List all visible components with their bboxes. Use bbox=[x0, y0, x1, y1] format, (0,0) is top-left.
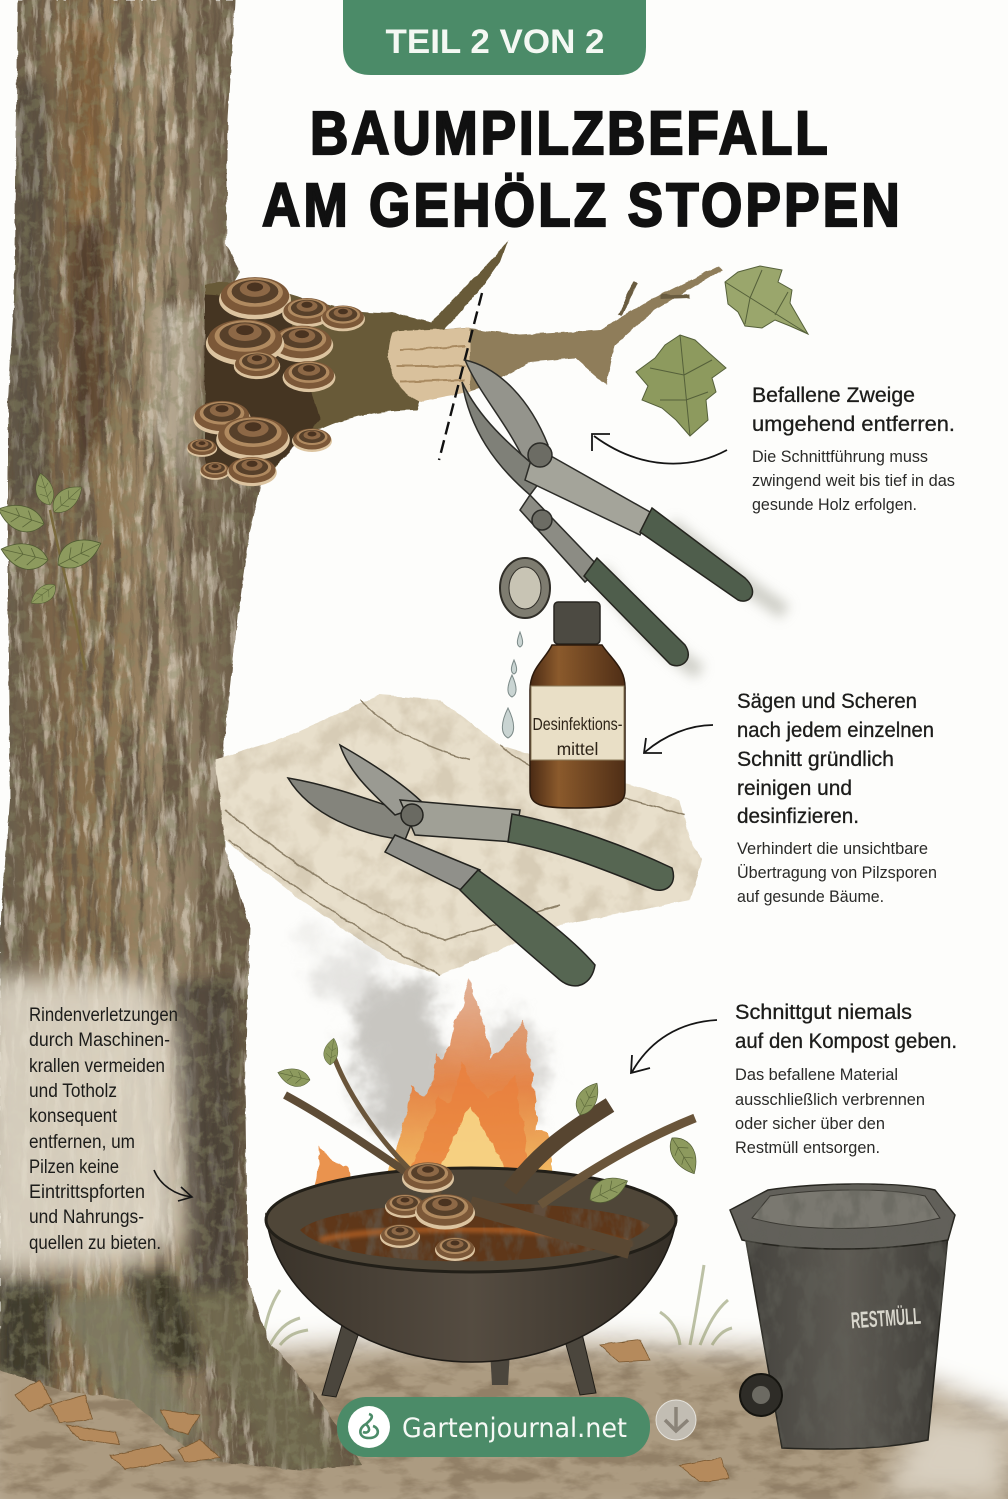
ground bbox=[0, 1322, 1008, 1499]
text block: no compost: ausschließlich verbrennen bbox=[735, 1091, 925, 1109]
bin label: RESTMÜLL bbox=[850, 1303, 922, 1333]
icon: download button bbox=[656, 1400, 696, 1440]
arrow: fire callout bbox=[631, 1020, 717, 1073]
pill: series label: TEIL 2 VON 2 bbox=[386, 23, 604, 61]
footer badge: Gartenjournal.net bbox=[402, 1413, 627, 1444]
tree trunk bbox=[0, 0, 370, 1480]
trunk sprig leaves bbox=[0, 471, 106, 670]
arrow: prevention note bbox=[154, 1170, 192, 1201]
branch leaves bbox=[636, 266, 808, 436]
text block: no compost bbox=[735, 1001, 957, 1157]
text block: remove branches: Die Schnittführung muss bbox=[752, 448, 928, 466]
text block: remove branches bbox=[752, 384, 955, 514]
text block: clean tools: Sägen und Scheren bbox=[737, 690, 917, 713]
text block: remove branches: gesunde Holz erfolgen. bbox=[752, 496, 917, 514]
text block: remove branches: zwingend weit bis tief in das bbox=[752, 472, 955, 490]
text block: clean tools: nach jedem einzelnen bbox=[737, 719, 934, 742]
grass tufts bbox=[262, 1265, 732, 1345]
text block: clean tools: desinfizieren. bbox=[737, 805, 859, 828]
footer badge bbox=[337, 1397, 650, 1457]
fallen leaves bbox=[15, 1340, 730, 1482]
dashed cut line bbox=[439, 293, 482, 460]
pale wash behind side note bbox=[0, 975, 182, 1275]
text block: prevention note: Pilzen keine bbox=[29, 1157, 119, 1178]
title bbox=[262, 100, 900, 240]
text block: clean tools bbox=[737, 690, 937, 906]
bracket fungi cluster bbox=[187, 277, 365, 486]
text block: no compost: Restmüll entsorgen. bbox=[735, 1139, 880, 1157]
branch bbox=[205, 240, 722, 482]
fire pit bowl bbox=[266, 1168, 677, 1397]
text block: prevention note: und Nahrungs- bbox=[29, 1207, 144, 1228]
text block: no compost: oder sicher über den bbox=[735, 1115, 885, 1133]
text block: remove branches: Befallene Zweige bbox=[752, 384, 915, 407]
icon: loppers bbox=[462, 360, 785, 672]
burning branches and fungi bbox=[276, 1037, 704, 1261]
bottle label: Desinfektions- bbox=[532, 714, 623, 734]
text block: prevention note: durch Maschinen- bbox=[29, 1030, 170, 1051]
icon: logo sprout bbox=[360, 1414, 378, 1438]
text block: clean tools: reinigen und bbox=[737, 777, 852, 800]
bottle label bbox=[532, 714, 623, 759]
cloth bbox=[210, 690, 710, 980]
icon: secateurs bbox=[288, 745, 673, 986]
text block: prevention note: konsequent bbox=[29, 1106, 118, 1127]
drops bbox=[502, 632, 523, 738]
text block: no compost: auf den Kompost geben. bbox=[735, 1030, 957, 1053]
text block: clean tools: Verhindert die unsichtbare bbox=[737, 840, 928, 858]
text block: prevention note: entfernen, um bbox=[29, 1132, 135, 1153]
text block: prevention note: Eintrittspforten bbox=[29, 1182, 145, 1203]
text block: clean tools: auf gesunde Bäume. bbox=[737, 888, 884, 906]
text block: no compost: Schnittgut niemals bbox=[735, 1001, 912, 1024]
text block: clean tools: Schnitt gründlich bbox=[737, 748, 894, 771]
text block: prevention note: krallen vermeiden bbox=[29, 1056, 165, 1077]
text block: prevention note bbox=[29, 1005, 178, 1254]
text block: prevention note: Rindenverletzungen bbox=[29, 1005, 178, 1026]
text block: remove branches: umgehend entferren. bbox=[752, 413, 955, 436]
flames bbox=[305, 978, 551, 1228]
text block: prevention note: und Totholz bbox=[29, 1081, 117, 1102]
arrow: branch callout bbox=[592, 434, 727, 464]
title: BAUMPILZBEFALL bbox=[310, 100, 828, 168]
text block: no compost: Das befallene Material bbox=[735, 1066, 898, 1084]
smoke bbox=[290, 919, 544, 1143]
bottle label: mittel bbox=[557, 739, 598, 759]
arrow: bottle callout bbox=[644, 725, 713, 753]
title: AM GEHÖLZ STOPPEN bbox=[262, 172, 900, 240]
text block: clean tools: Übertragung von Pilzsporen bbox=[737, 864, 937, 882]
icon: waste bin bbox=[725, 1180, 960, 1455]
text block: prevention note: quellen zu bieten. bbox=[29, 1233, 161, 1254]
icon: disinfectant bottle bbox=[500, 558, 625, 808]
pill: series label bbox=[343, 0, 646, 75]
